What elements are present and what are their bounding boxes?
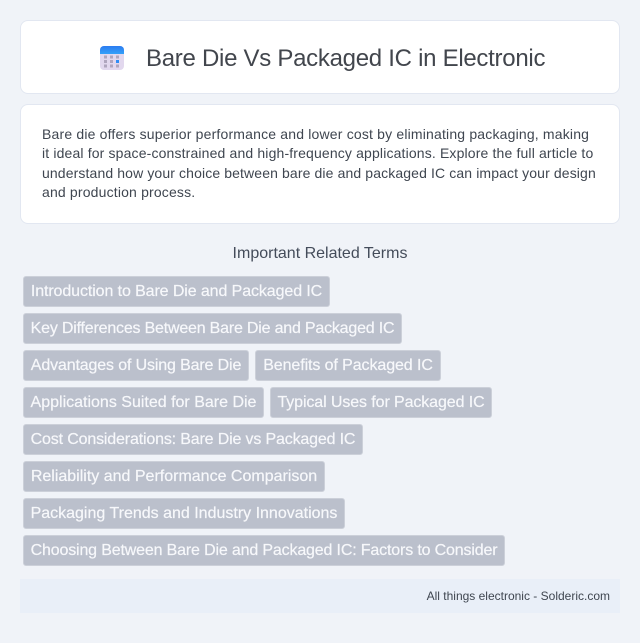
tag: Key Differences Between Bare Die and Packaged IC <box>31 320 394 337</box>
intro text: it ideal for space-constrained and high-frequency applications. Explore the full article to <box>42 145 593 161</box>
tag: Reliability and Performance Comparison <box>31 468 317 485</box>
icon: calendar <box>100 46 124 70</box>
intro card <box>20 104 620 224</box>
tag <box>23 535 505 566</box>
tag: Packaging Trends and Industry Innovations <box>31 505 337 522</box>
tag <box>23 313 402 344</box>
tag: Introduction to Bare Die and Packaged IC <box>31 283 322 300</box>
intro text: and production process. <box>42 184 195 200</box>
tag <box>255 350 441 381</box>
tag: Cost Considerations: Bare Die vs Packaged IC <box>31 431 355 448</box>
tag: Benefits of Packaged IC <box>263 357 433 374</box>
footer bar <box>20 579 620 613</box>
tag <box>23 461 325 492</box>
section heading: Important Related Terms <box>233 245 407 262</box>
intro text <box>42 126 596 200</box>
intro text: Bare die offers superior performance and lower cost by eliminating packaging, making <box>42 126 589 142</box>
tag: Advantages of Using Bare Die <box>31 357 241 374</box>
tag <box>23 498 345 529</box>
tag <box>23 424 363 455</box>
title: Bare Die Vs Packaged IC in Electronic <box>146 45 545 72</box>
tag <box>23 276 330 307</box>
tag: Typical Uses for Packaged IC <box>277 394 485 411</box>
tag: Choosing Between Bare Die and Packaged IC: Factors to Consider <box>31 542 497 559</box>
tag: Applications Suited for Bare Die <box>31 394 256 411</box>
tag <box>270 387 492 418</box>
tag <box>23 350 249 381</box>
tag <box>23 387 264 418</box>
term tags <box>23 276 505 566</box>
header card <box>20 20 620 94</box>
intro text: understand how your choice between bare die and packaged IC can impact your design <box>42 165 596 181</box>
footer text: All things electronic - Solderic.com <box>427 589 610 603</box>
